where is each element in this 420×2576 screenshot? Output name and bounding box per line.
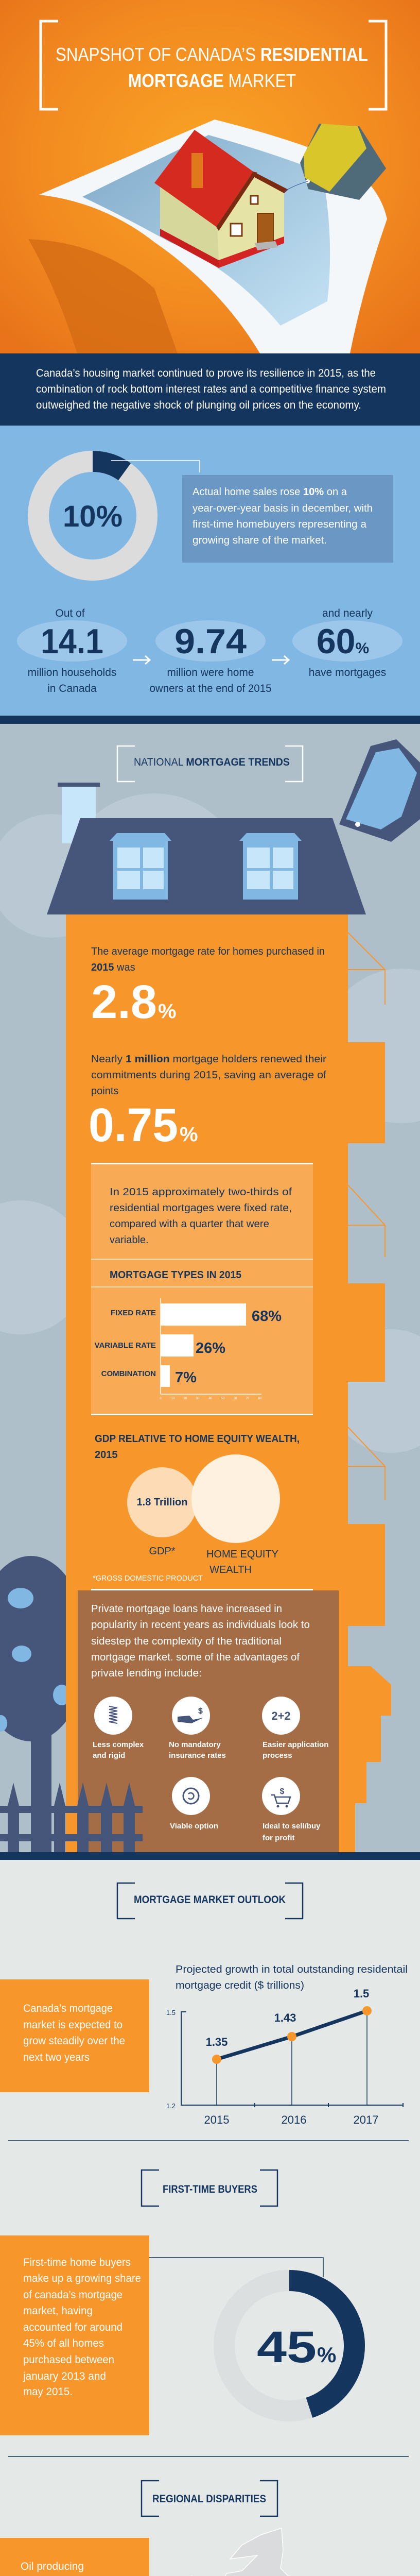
bar chart: 50 [221, 1397, 225, 1400]
callout: oil producing regions: Oil producing [21, 2561, 84, 2572]
icon: 2+2: Easier application [262, 1740, 328, 1749]
map: Canada [162, 2528, 409, 2576]
stat: 9.74 million home owners: owners at the end of 2015 [149, 683, 272, 694]
bar chart: 60 [234, 1397, 237, 1400]
callout: first-time buyers [0, 2235, 149, 2435]
line chart: projected mortgage credit: 2016 [282, 2113, 306, 2126]
bar chart: 26% [196, 1340, 225, 1357]
panel: national mortgage trends [0, 724, 420, 1852]
panel: mortgage types: variable. [110, 1234, 149, 1246]
stat: 60% have mortgages: have mortgages [309, 667, 386, 679]
stat: average mortgage rate 2.8%: 2.8 [91, 976, 157, 1028]
stat: average mortgage rate 2.8%: 2015 was [91, 962, 135, 973]
donut chart 10%: 10% [63, 500, 122, 533]
line chart: projected mortgage credit: 2017 [354, 2113, 378, 2126]
donut chart 10% [38, 462, 147, 570]
icon: hand with dollar: insurance rates [169, 1751, 226, 1760]
callout: home sales rose: growing share of the market. [192, 535, 327, 546]
illustration: house roof [47, 783, 366, 914]
donut chart 45%: 45 [257, 2323, 317, 2372]
callout: market growth: next two years [23, 2052, 90, 2063]
stat: 14.1 million households [17, 607, 127, 694]
icon: 2+2 [262, 1697, 328, 1760]
callout: first-time buyers: may 2015. [23, 2386, 73, 2398]
donut chart 45% [224, 2280, 354, 2411]
title: MORTGAGE MARKET [128, 70, 296, 91]
icon: spring (less complex) [93, 1697, 144, 1760]
callout: market growth [0, 1979, 149, 2092]
bar chart: 0 [160, 1397, 162, 1400]
stat: 14.1 million households: in Canada [47, 683, 97, 694]
fence [0, 1783, 143, 1852]
bar chart: 80 [258, 1397, 262, 1400]
heading: MORTGAGE MARKET OUTLOOK [134, 1894, 286, 1906]
chart: GDP vs home equity: WEALTH [209, 1564, 252, 1575]
intro text band: combination of rock bottom interest rates and a competitive finance system [36, 383, 386, 395]
panel: private lending [78, 1590, 339, 1852]
stat: 14.1 million households: million households [28, 667, 116, 679]
line chart: projected mortgage credit: 2015 [204, 2113, 229, 2126]
icon: hand with dollar [169, 1697, 226, 1760]
icon: 2+2: process [262, 1751, 292, 1760]
chart: GDP vs home equity: GDP RELATIVE TO HOME EQUITY WEALTH, [95, 1433, 300, 1445]
icon: shopping cart: for profit [262, 1834, 294, 1842]
panel: private lending: private lending include: [91, 1668, 202, 1679]
stat: 1 million renewed 0.75%: Nearly 1 million mortgage holders renewed their [91, 1054, 326, 1065]
header panel [0, 0, 420, 353]
stat: average mortgage rate 2.8%: The average mortgage rate for homes purchased in [91, 946, 325, 957]
heading [117, 1883, 303, 1919]
icon: 2+2: 2+2 [271, 1709, 291, 1722]
panel: home sales stats [0, 426, 420, 716]
panel: mortgage types: residential mortgages were fixed rate, [110, 1202, 292, 1214]
callout: first-time buyers: january 2013 and [23, 2370, 106, 2382]
bar chart: 30 [196, 1397, 200, 1400]
callout: first-time buyers: purchased between [23, 2354, 114, 2366]
intro text band: outweighed the negative shock of plunging oil prices on the economy. [36, 399, 361, 411]
donut chart 45%: % [317, 2343, 336, 2367]
stat: 9.74 million home owners [149, 620, 272, 694]
bar chart: COMBINATION [101, 1369, 156, 1378]
panel: mortgage types: MORTGAGE TYPES IN 2015 [110, 1269, 241, 1281]
stat: 1 million renewed 0.75%: 0.75 [89, 1099, 178, 1151]
stat: 14.1 million households: 14.1 [41, 622, 103, 661]
stat: 1 million renewed 0.75% [89, 1054, 326, 1151]
chart: GDP vs home equity [93, 1433, 300, 1583]
panel: mortgage types [91, 1163, 313, 1415]
bar chart [95, 1298, 282, 1400]
stat: 1 million renewed 0.75%: % [180, 1123, 198, 1146]
stat: 1 million renewed 0.75%: commitments during 2015, saving an average of [91, 1070, 326, 1081]
heading: NATIONAL MORTGAGE TRENDS [134, 756, 290, 768]
callout: home sales rose: Actual home sales rose 10% on a [192, 486, 347, 498]
line chart: projected mortgage credit: Projected growth in total outstanding residentail [176, 1964, 408, 1975]
line chart: projected mortgage credit: 1.2 [166, 2102, 176, 2110]
panel: private lending: popularity in recent years as individuals look to [91, 1619, 310, 1631]
intro text band [0, 353, 420, 426]
panel: private lending: mortgage market. some of the advantages of [91, 1652, 300, 1663]
stat: average mortgage rate 2.8%: % [158, 1000, 177, 1023]
callout: home sales rose: first-time homebuyers representing a [192, 519, 367, 530]
bar chart: FIXED RATE [111, 1309, 156, 1317]
icon: spring (less complex): and rigid [93, 1751, 125, 1760]
heading: first-time buyers: FIRST-TIME BUYERS [163, 2183, 257, 2195]
icon: shopping cart: $ [280, 1787, 285, 1796]
line chart: projected mortgage credit: 1.35 [206, 2036, 227, 2048]
line chart: projected mortgage credit: mortgage credit ($ trillions) [176, 1980, 304, 1991]
icon: refresh (viable option): Viable option [170, 1822, 218, 1831]
stat: 9.74 million home owners: 9.74 [174, 622, 247, 661]
callout: market growth: Canada’s mortgage [23, 2003, 113, 2014]
bar chart: 70 [246, 1397, 250, 1400]
stat: 60% have mortgages: 60% [317, 622, 369, 661]
title: SNAPSHOT OF CANADA’S RESIDENTIAL [56, 44, 368, 65]
heading: regional disparities [142, 2481, 277, 2516]
icon: price tag [339, 739, 420, 842]
orange building [66, 914, 391, 1852]
title [41, 21, 386, 109]
icon: shopping cart [262, 1777, 321, 1842]
bar chart: 68% [252, 1308, 282, 1325]
stat: 1 million renewed 0.75%: points [91, 1086, 118, 1097]
bar chart: 40 [209, 1397, 213, 1400]
icon: hand with dollar: No mandatory [169, 1740, 221, 1749]
chart: GDP vs home equity: 1.8 Trillion [137, 1497, 187, 1508]
bar chart: 7% [175, 1369, 197, 1386]
heading [117, 746, 303, 782]
callout: market growth: grow steadily over the [23, 2035, 125, 2047]
stat: 60% have mortgages [292, 607, 402, 679]
icon: shopping cart: Ideal to sell/buy [262, 1822, 321, 1831]
callout: first-time buyers: of canada’s mortgage [23, 2289, 122, 2301]
chart: GDP vs home equity: GDP* [149, 1546, 176, 1557]
bar chart: VARIABLE RATE [95, 1341, 156, 1350]
callout: oil producing regions [0, 2538, 149, 2576]
stat: 14.1 million households: Out of [55, 607, 85, 619]
callout: market growth: market is expected to [23, 2019, 122, 2031]
panel: private lending: Private mortgage loans have increased in [91, 1603, 282, 1615]
callout: first-time buyers: make up a growing share [23, 2273, 141, 2284]
callout: first-time buyers: accounted for around [23, 2321, 122, 2333]
callout: home sales rose [182, 475, 393, 563]
arrow [133, 656, 150, 664]
icon: spring (less complex): Less complex [93, 1740, 144, 1749]
stat: average mortgage rate 2.8% [91, 946, 325, 1028]
panel: mortgage types: compared with a quarter that were [110, 1218, 269, 1230]
line chart: projected mortgage credit: 1.5 [354, 1987, 369, 2000]
callout: first-time buyers: First-time home buyers [23, 2257, 131, 2268]
heading: first-time buyers [142, 2170, 277, 2206]
stat: 9.74 million home owners: million were home [167, 667, 254, 679]
intro text band: Canada’s housing market continued to prove its resilience in 2015, as the [36, 367, 376, 379]
line chart: projected mortgage credit: 1.43 [274, 2011, 296, 2024]
panel: mortgage types: In 2015 approximately two-thirds of [110, 1187, 292, 1198]
panel: private lending: sidestep the complexity of the traditional [91, 1636, 282, 1647]
callout: home sales rose: year-over-year basis in december, with [192, 503, 373, 514]
heading: regional disparities: REGIONAL DISPARITIES [152, 2493, 266, 2505]
panel: mortgage market outlook [0, 1860, 420, 2576]
chart: GDP vs home equity: *GROSS DOMESTIC PRODUCT [93, 1574, 203, 1583]
arrow [272, 656, 289, 664]
line chart: projected mortgage credit [166, 1964, 408, 2126]
bar chart: 10 [171, 1397, 175, 1400]
chart: GDP vs home equity: 2015 [95, 1449, 117, 1461]
chart: GDP vs home equity: HOME EQUITY [206, 1549, 278, 1560]
icon: refresh (viable option) [170, 1777, 218, 1831]
illustration: paper sheet with house and price tag [28, 120, 387, 353]
icon: hand with dollar: $ [198, 1707, 203, 1716]
stat: 60% have mortgages: and nearly [322, 607, 373, 619]
tree [0, 1556, 87, 1852]
callout: first-time buyers: 45% of all homes [23, 2337, 104, 2349]
line chart: projected mortgage credit: 1.5 [166, 2009, 176, 2016]
bar chart: 20 [184, 1397, 187, 1400]
callout: first-time buyers: market, having [23, 2305, 93, 2317]
